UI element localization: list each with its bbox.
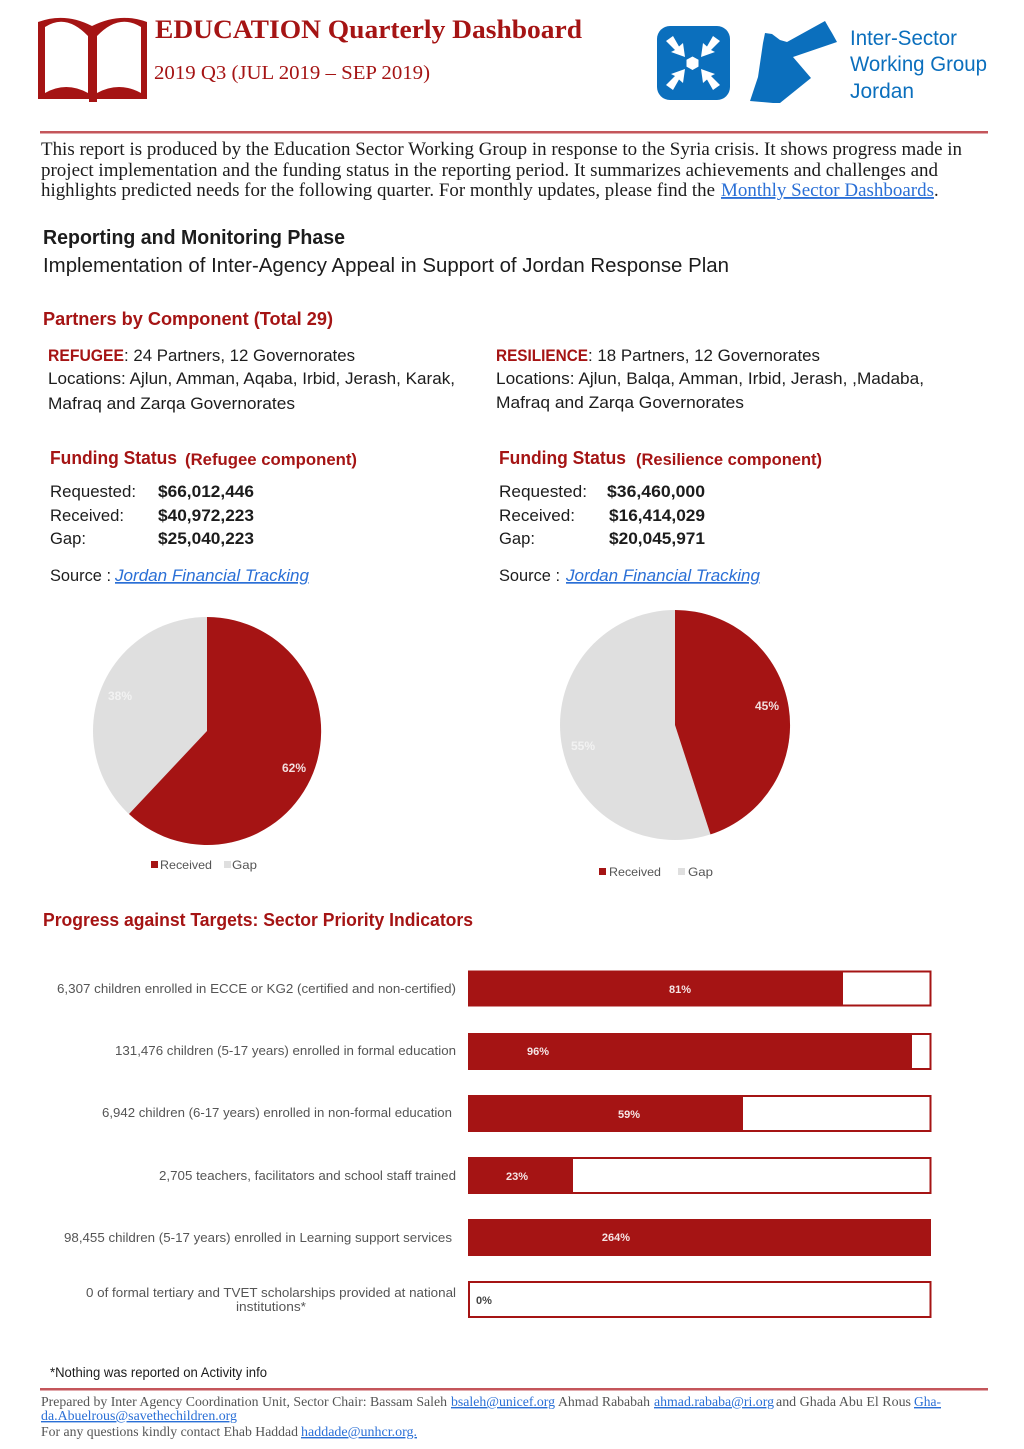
pie chart: refugee funding (93, 617, 321, 845)
intro text: This report is produced by the Education Sector Working Group in response to the Syria crisis. It shows progress made in (41, 140, 962, 160)
pie chart: refugee funding: 62% (282, 761, 306, 775)
text block: refugee partners: Mafraq and Zarqa Governorates (48, 395, 295, 413)
icon: open book (38, 18, 147, 102)
heading: progress against targets: Progress against Targets: Sector Priority Indicators (43, 909, 473, 930)
bar chart: sector priority indicators (57, 971, 931, 1317)
footer: credits and contacts (41, 1395, 941, 1440)
text block: resilience partners: Mafraq and Zarqa Governorates (496, 394, 744, 412)
bar: teachers trained: 2,705 teachers, facilitators and school staff trained (159, 1169, 456, 1183)
footer: credits and contacts: Ahmad Rababah (558, 1395, 650, 1410)
bar: formal education: 96% (527, 1046, 549, 1058)
heading: reporting and monitoring phase: Reporting and Monitoring Phase (43, 227, 345, 249)
text block: resilience partners: RESILIENCE (496, 347, 588, 365)
funding table: resilience: $20,045,971 (609, 529, 705, 548)
text block: resilience partners (496, 347, 924, 412)
intro text: Monthly Sector Dashboards (721, 181, 934, 201)
funding table: resilience: $16,414,029 (609, 506, 705, 525)
bar: learning support services: 264% (602, 1232, 630, 1244)
pie legend: resilience: Received (609, 865, 661, 879)
heading: funding status refugee (50, 448, 357, 469)
footer: credits and contacts: da.Abuelrous@savethechildren.org (41, 1409, 237, 1424)
text block: resilience partners: : 18 Partners, 12 Governorates (588, 347, 820, 365)
footer: credits and contacts: Prepared by Inter Agency Coordination Unit, Sector Chair: Bassam Saleh (41, 1395, 447, 1410)
logo text: Jordan (850, 80, 914, 103)
pie legend: refugee: Gap (232, 858, 257, 872)
footer: credits and contacts: and Ghada Abu El Rous (776, 1395, 911, 1410)
bar: formal education: 131,476 children (5-17 years) enrolled in formal education (115, 1044, 456, 1058)
bar: learning support services: 98,455 children (5-17 years) enrolled in Learning support services (64, 1231, 452, 1245)
bar: teachers trained: 23% (506, 1171, 528, 1183)
bar: teachers trained (159, 1157, 930, 1194)
heading: funding status resilience: Funding Status (499, 448, 626, 468)
icon: coordination logo (657, 26, 730, 100)
funding table: refugee: Requested: (50, 482, 136, 501)
funding table: refugee: $66,012,446 (158, 482, 254, 501)
pie legend: resilience (599, 865, 713, 879)
funding table: refugee: Received: (50, 506, 124, 525)
pie chart: resilience funding: 45% (755, 699, 779, 713)
funding table: resilience: $36,460,000 (607, 482, 705, 501)
funding table: refugee: $40,972,223 (158, 506, 254, 525)
subtitle: reporting period: 2019 Q3 (JUL 2019 – SEP 2019) (154, 62, 430, 84)
footer: credits and contacts: bsaleh@unicef.org (451, 1395, 555, 1410)
footer: credits and contacts: haddade@unhcr.org. (301, 1425, 417, 1440)
footer: credits and contacts: For any questions kindly contact Ehab Haddad (41, 1425, 298, 1440)
text block: refugee partners: REFUGEE (48, 347, 124, 365)
heading: funding status refugee: (Refugee component) (185, 451, 357, 469)
bar: ECCE enrolment (57, 971, 930, 1006)
heading: reporting and monitoring phase (43, 227, 729, 277)
logo text: Inter-Sector (850, 27, 957, 50)
intro text: highlights predicted needs for the following quarter. For monthly updates, please find the (41, 181, 715, 201)
heading: funding status refugee: Funding Status (50, 448, 177, 468)
heading: reporting and monitoring phase: Implementation of Inter-Agency Appeal in Support of Jordan Response Plan (43, 255, 729, 277)
funding table: refugee (50, 482, 254, 548)
funding table: refugee: Gap: (50, 529, 86, 548)
bar: scholarships (86, 1282, 930, 1317)
footnote: *Nothing was reported on Activity info (50, 1365, 267, 1380)
text block: resilience partners: Locations: Ajlun, Balqa, Amman, Irbid, Jerash, ,Madaba, (496, 370, 924, 388)
icon: map of Jordan (750, 21, 837, 103)
intro text: . (934, 181, 939, 201)
heading: funding status resilience (499, 448, 822, 469)
bar: scholarships: institutions* (236, 1300, 306, 1314)
title: EDUCATION Quarterly Dashboard (155, 15, 583, 44)
pie legend: refugee (151, 858, 257, 872)
funding table: resilience: Gap: (499, 529, 535, 548)
pie legend: resilience: Gap (688, 865, 713, 879)
logo text: Working Group (850, 53, 987, 76)
text block: refugee partners (48, 347, 455, 413)
funding table: resilience: Received: (499, 506, 575, 525)
source link: resilience: Source : (499, 566, 560, 585)
heading: funding status resilience: (Resilience component) (636, 451, 822, 469)
bar: scholarships: 0% (476, 1295, 492, 1307)
source link: resilience: Jordan Financial Tracking (565, 566, 761, 585)
source link: refugee: Jordan Financial Tracking (114, 566, 310, 585)
bar: learning support services (64, 1219, 931, 1256)
pie chart: refugee funding: 38% (108, 689, 132, 703)
text block: refugee partners: Locations: Ajlun, Amman, Aqaba, Irbid, Jerash, Karak, (48, 370, 455, 388)
logo text (850, 27, 987, 103)
funding table: refugee: $25,040,223 (158, 529, 254, 548)
footer: credits and contacts: Gha- (914, 1395, 941, 1410)
bar: non-formal education: 6,942 children (6-17 years) enrolled in non-formal education (102, 1106, 452, 1120)
pie chart: resilience funding (560, 610, 790, 840)
funding table: resilience (499, 482, 705, 548)
pie legend: refugee: Received (160, 858, 212, 872)
source link: refugee: Source : (50, 566, 111, 585)
funding table: resilience: Requested: (499, 482, 587, 501)
bar: ECCE enrolment: 6,307 children enrolled in ECCE or KG2 (certified and non-certified) (57, 982, 456, 996)
bar: scholarships: 0 of formal tertiary and TVET scholarships provided at national (86, 1286, 456, 1300)
intro text (41, 140, 962, 201)
bar: formal education (115, 1033, 930, 1070)
bar: non-formal education: 59% (618, 1109, 640, 1121)
bar: ECCE enrolment: 81% (669, 984, 691, 996)
heading: partners by component: Partners by Component (Total 29) (43, 308, 333, 329)
intro text: project implementation and the funding status in the reporting period. It summarizes achievements and challenges and (41, 161, 939, 181)
footer: credits and contacts: ahmad.rababa@ri.org (654, 1395, 774, 1410)
pie chart: resilience funding: 55% (571, 739, 595, 753)
bar: non-formal education (102, 1095, 930, 1132)
text block: refugee partners: : 24 Partners, 12 Governorates (124, 347, 355, 365)
